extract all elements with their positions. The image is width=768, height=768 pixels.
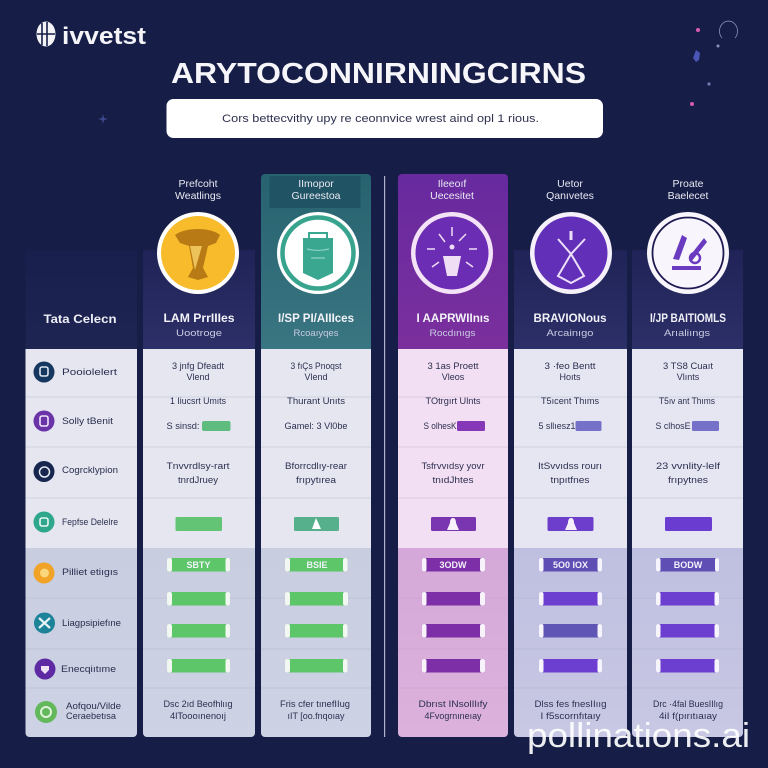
- icon: lightbulb cup: [411, 212, 493, 294]
- cell text: Vlend: [304, 372, 328, 382]
- cell text: Fris cfer tınefIIug: [280, 699, 350, 709]
- column header label: Uecesitet: [430, 190, 474, 202]
- cell text: Hoıts: [559, 372, 581, 382]
- row label 4: Fepfse Delelre: [62, 517, 118, 528]
- violet bar: [665, 517, 712, 531]
- column header label: Gureestoa: [291, 190, 341, 202]
- column header label: [175, 178, 221, 202]
- cell text: T5ıv ant Thıms: [659, 396, 715, 406]
- column 5: [632, 178, 743, 737]
- cell text: [164, 361, 232, 721]
- cell text: Tnvvrdlsy-rart: [166, 461, 230, 471]
- cell text: Bforrcdlıy-rear: [285, 461, 347, 471]
- row label 1: Pooiolelert: [62, 367, 117, 378]
- violet bar with marker: [548, 517, 594, 531]
- cell text: Tsfrvvıdsy yovr: [422, 461, 484, 471]
- column header label: [430, 178, 474, 202]
- plan subtitle: Rocdınıgs: [430, 328, 476, 339]
- column header label: Baelecet: [668, 190, 709, 202]
- cell text: Vlınts: [677, 372, 700, 382]
- column header label: Uetor: [557, 178, 583, 190]
- cell text: tnıdJhtes: [432, 475, 474, 485]
- vertical divider: [384, 176, 385, 737]
- cell text: frıpytırea: [296, 475, 336, 485]
- row label 8: Ceraebetısa: [66, 711, 117, 722]
- icon: purple marks: [647, 212, 729, 294]
- feature bars: [422, 558, 485, 672]
- green bar: [176, 517, 222, 531]
- small violet bar: [692, 421, 719, 431]
- plan subtitle: Arıaliıngs: [664, 328, 710, 339]
- column 4: [514, 178, 627, 737]
- column header label: Weatlings: [175, 190, 221, 202]
- row label 8: [66, 701, 121, 722]
- cell text: Thurant Unıts: [287, 396, 346, 406]
- icon: teal tag: [277, 212, 359, 294]
- cell text: tnrdJruey: [178, 475, 219, 485]
- cell text: S clhosE: [656, 421, 690, 431]
- feature bars: 3ODW: [440, 560, 467, 570]
- row icon 8: [35, 701, 57, 723]
- subtitle box: [166, 99, 603, 138]
- row icon 5: [34, 562, 54, 584]
- purple bar with marker: [431, 517, 476, 531]
- cell text: [280, 361, 350, 721]
- column header label: Proate: [673, 178, 704, 190]
- row icon 6: [34, 612, 55, 634]
- feature bars: BSIE: [306, 560, 328, 570]
- feature bars: BODW: [674, 560, 703, 570]
- cell text: [418, 361, 488, 721]
- row icon 4: [34, 512, 54, 532]
- column 2: [261, 174, 371, 737]
- cell text: Dsc 2ıd Beofhlııg: [164, 699, 232, 709]
- cell text: 23 vvnlity-lelf: [656, 461, 721, 471]
- cell text: ıIT [oo.fnqoıay: [288, 711, 345, 721]
- cell text: 5 sllıesz1: [538, 421, 576, 431]
- feature bars: [539, 558, 602, 672]
- column 3: [398, 174, 508, 737]
- cell text: frıpytnes: [668, 475, 709, 485]
- plan name: I/JP BAITIOMLS: [650, 313, 726, 325]
- cell text: 3 1as Proett: [428, 361, 479, 371]
- column 1: [143, 178, 255, 737]
- row label 7: Enecqiıtıme: [61, 664, 116, 675]
- cell text: TOtrgırt Ulnts: [426, 396, 481, 406]
- row label 3: Cogrcklypion: [62, 465, 118, 476]
- column header label: [546, 178, 594, 202]
- decorative stars: [98, 21, 738, 124]
- icon: figure: [530, 212, 612, 294]
- cell text: I f5scornfıtaıy: [540, 711, 601, 721]
- cell text: 4iI f(pırıtıaıay: [659, 711, 718, 721]
- column: row labels: Tata Celecn: [44, 312, 116, 326]
- row icon 7: [34, 658, 56, 680]
- small violet bar: [576, 421, 602, 431]
- row label 8: Aofqou/Vilde: [66, 701, 121, 712]
- plan name: LAM PrrIIIes: [164, 313, 234, 325]
- cell text: S olhesK: [424, 421, 456, 431]
- watermark: pollinations.ai: [527, 717, 750, 755]
- small green bar: [202, 421, 230, 431]
- cell text: Dbrıst INsolIlıfy: [418, 699, 488, 709]
- cell text: 1 Iiucsrt Umıts: [170, 396, 226, 406]
- plan subtitle: Uootroge: [176, 328, 222, 339]
- column header label: Qanıvetes: [546, 190, 594, 202]
- row icon 1: [34, 362, 54, 382]
- feature bars: [285, 558, 348, 672]
- logo: ivvetst: [62, 23, 146, 50]
- row label 6: Liagpsipiefıne: [62, 618, 121, 629]
- cell text: 3 TS8 Cuaıt: [663, 361, 714, 371]
- cell text: S sinsd:: [166, 421, 200, 431]
- plan name: BRAVIONous: [534, 313, 606, 325]
- icon: gold emblem: [157, 212, 239, 294]
- subtitle box: Cors bettecvithy upy re ceonnvice wrest aind opl 1 rious.: [222, 113, 539, 125]
- cell text: Vlend: [186, 372, 210, 382]
- cell text: [653, 361, 723, 721]
- column: row labels: [26, 250, 137, 737]
- column header label: IImopor: [298, 178, 334, 190]
- column header label: [668, 178, 709, 202]
- green bar with marker: [294, 517, 339, 531]
- small purple bar: [457, 421, 485, 431]
- title: ARYTOCONNIRNINGCIRNS: [171, 58, 586, 90]
- cell text: 3 fıÇs Pnoqst: [290, 361, 342, 371]
- row icon 2: [34, 410, 54, 432]
- feature bars: [656, 558, 719, 672]
- plan name: I/SP PI/AIIIces: [278, 313, 354, 325]
- row label 2: Solly tBenit: [62, 416, 113, 427]
- cell text: ItSvvıdss rourı: [538, 461, 602, 471]
- cell text: 4Fvogrnıneıay: [424, 711, 482, 721]
- cell text: Gamel: 3 Vl0be: [284, 421, 348, 431]
- logo: [36, 22, 146, 50]
- column header label: Prefcoht: [178, 178, 218, 190]
- cell text: Vleos: [442, 372, 465, 382]
- plan subtitle: Arcainıgo: [546, 328, 594, 339]
- feature bars: 5O0 IOX: [553, 560, 588, 570]
- plan name: I AAPRWIInıs: [416, 313, 490, 325]
- cell text: Dlss fes fnesIIııg: [534, 699, 606, 709]
- cell text: Drc ·4fal BuesIIlıg: [653, 699, 723, 709]
- cell text: [534, 361, 606, 721]
- cell text: 3 ·feo Bentt: [544, 361, 596, 371]
- plan subtitle: Rcoaıyqes: [294, 328, 339, 339]
- cell text: tnpıtfnes: [550, 475, 590, 485]
- cell text: 4lToooınenoıj: [170, 711, 226, 721]
- feature bars: [167, 558, 230, 672]
- feature bars: SBTY: [186, 560, 211, 570]
- row label 5: Pilliet etiıgıs: [62, 567, 118, 578]
- column header label: Ileeoıf: [438, 178, 466, 190]
- column header label: [291, 178, 341, 202]
- row icon 3: [34, 461, 54, 482]
- cell text: T5ıcent Thıms: [541, 396, 599, 406]
- cell text: 3 jnfg Dfeadt: [172, 361, 224, 371]
